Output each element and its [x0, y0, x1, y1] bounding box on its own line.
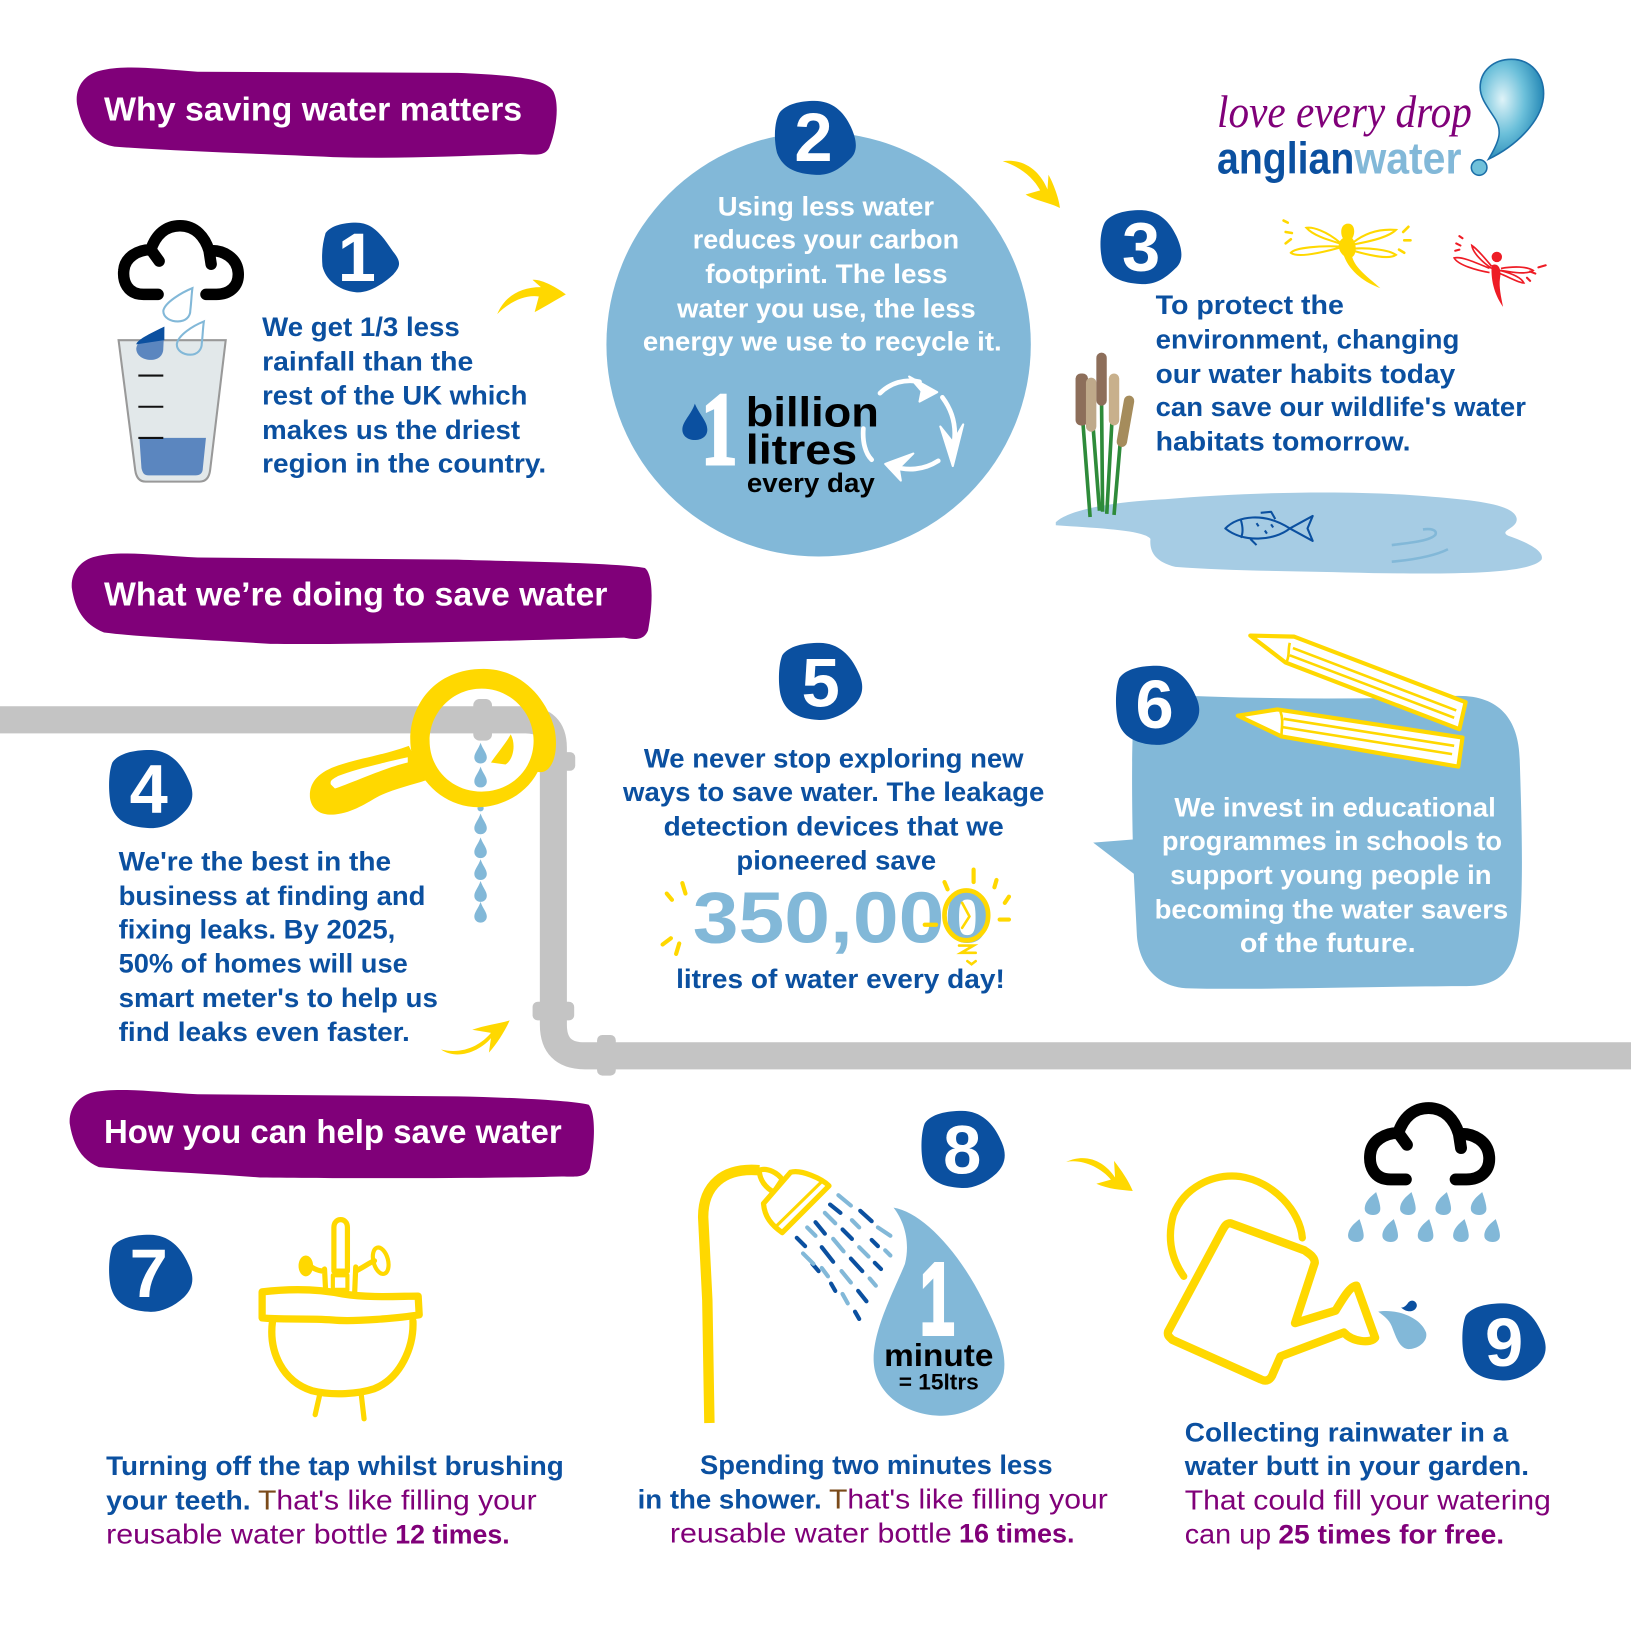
step 8 text: Spending two minutes less — [700, 1450, 1053, 1480]
step 2 number — [775, 99, 856, 176]
heading: what we're doing — [72, 554, 652, 644]
heading: why saving water matters: Why saving water matters — [104, 92, 522, 129]
step 8 number — [921, 1111, 1005, 1188]
step 9 text: can up — [1185, 1519, 1271, 1550]
step 9 text — [1184, 1418, 1551, 1550]
icon: fish — [1225, 512, 1313, 545]
step 9 number: 9 — [1485, 1304, 1523, 1381]
step 8 text: reusable water bottle — [670, 1518, 952, 1549]
icon: water splash — [1378, 1301, 1426, 1349]
step 5 text: 350,000 — [693, 877, 990, 958]
step 3 text: To protect the — [1156, 290, 1344, 320]
arrow: step 4 to 5 — [441, 1020, 510, 1054]
step 8 number: 8 — [943, 1111, 981, 1188]
step 2 text — [643, 191, 1002, 357]
step 4 number — [109, 750, 192, 828]
step 7 number: 7 — [130, 1235, 168, 1312]
icon: red dragonfly — [1454, 236, 1546, 307]
step 7 number — [109, 1235, 192, 1312]
step 4 text: find leaks even faster. — [119, 1017, 410, 1047]
arrow: step 1 to 2 — [497, 280, 566, 314]
step 5 text — [622, 744, 1044, 994]
step 9 text: Collecting rainwater in a — [1185, 1418, 1509, 1448]
step 1 text — [262, 312, 546, 478]
icon: shower — [703, 1169, 890, 1423]
logo: love every drop, anglian water — [1217, 59, 1544, 184]
step 7 text: That's like filling your — [258, 1484, 537, 1515]
leak drops — [474, 743, 487, 923]
step 3 text: our water habits today — [1156, 359, 1455, 389]
step 5 number: 5 — [802, 644, 840, 721]
logo: love every drop, anglian water: anglian — [1217, 135, 1354, 184]
step 4 text: business at finding and — [119, 881, 425, 911]
heading: how you can help: How you can help save water — [104, 1114, 562, 1151]
step 3 number — [1100, 208, 1181, 285]
step 1 text: rest of the UK which — [262, 381, 527, 411]
icon: drop with 1 minute: 1 — [920, 1242, 955, 1357]
panel: step 2 circle — [606, 99, 1031, 557]
heading: what we're doing: What we’re doing to save water — [104, 576, 608, 613]
step 2 text: energy we use to recycle it. — [643, 327, 1002, 357]
heading: how you can help — [70, 1090, 594, 1178]
1 billion litres stat: litres — [746, 426, 857, 473]
step 5 text: ways to save water. The leakage — [622, 777, 1044, 807]
step 7 text: your teeth. — [106, 1485, 251, 1515]
step 6 text: of the future. — [1240, 928, 1416, 958]
step 6 text: programmes in schools to — [1162, 826, 1502, 856]
icon: rain cloud — [1348, 1108, 1500, 1242]
step 1 number — [322, 219, 399, 296]
step 7 text: reusable water bottle — [106, 1519, 388, 1550]
arrow: step 8 to 9 — [1066, 1158, 1133, 1191]
icon: magnifying glass and leak — [310, 669, 556, 923]
step 4 number: 4 — [130, 750, 168, 827]
step 6 text: We invest in educational — [1174, 793, 1496, 823]
step 6 text: support young people in — [1170, 860, 1492, 890]
step 3 text: can save our wildlife's water — [1156, 392, 1526, 422]
step 4 text — [119, 847, 438, 1047]
step 1 text: region in the country. — [262, 448, 546, 478]
step 1: cloud and glass icon — [119, 226, 238, 482]
step 4 text: fixing leaks. By 2025, — [119, 914, 395, 944]
step 2 text: Using less water — [718, 191, 935, 221]
1 billion litres stat — [682, 372, 879, 498]
1 billion litres stat: every day — [747, 468, 875, 498]
icon: watering can — [1168, 1176, 1375, 1381]
heading: why saving water matters — [77, 68, 557, 158]
step 9 text: That could fill your watering — [1185, 1484, 1551, 1515]
step 9 text: water butt in your garden. — [1184, 1451, 1529, 1481]
panel: step 6 speech bubble — [1093, 636, 1522, 989]
step 1 text: We get 1/3 less — [262, 312, 460, 342]
step 9 text: 25 times for free. — [1278, 1520, 1504, 1550]
step 4 text: smart meter's to help us — [119, 983, 438, 1013]
icon: drop with 1 minute: minute — [884, 1338, 993, 1373]
step 4 text: We're the best in the — [119, 847, 391, 877]
logo: love every drop, anglian water: love every drop — [1217, 86, 1472, 137]
icon: yellow dragonfly — [1284, 221, 1410, 288]
logo: love every drop, anglian water: water — [1353, 135, 1461, 184]
step 8 text: That's like filling your — [829, 1483, 1108, 1514]
step 1 text: rainfall than the — [262, 346, 473, 376]
step 2 text: reduces your carbon — [693, 225, 959, 255]
step 5 number — [779, 643, 862, 721]
step 3 number: 3 — [1122, 208, 1160, 285]
step 6 text: becoming the water savers — [1155, 894, 1508, 924]
step 8 text: in the shower. — [638, 1484, 822, 1514]
step 2 text: water you use, the less — [676, 293, 976, 323]
step 5 text: pioneered save — [736, 846, 936, 876]
step 6 text — [1155, 793, 1508, 958]
pipe — [0, 699, 1631, 1076]
icon: drop with 1 minute — [874, 1208, 1004, 1416]
1 billion litres stat: 1 — [701, 372, 737, 487]
step 5 text: detection devices that we — [664, 811, 1004, 841]
step 3 text — [1156, 290, 1526, 456]
step 7 text: Turning off the tap whilst brushing — [106, 1451, 564, 1481]
step 1 number: 1 — [338, 219, 376, 296]
1 billion litres stat: billion — [746, 388, 879, 435]
step 6 number — [1116, 666, 1199, 745]
step 6 number: 6 — [1136, 666, 1174, 743]
step 4 text: 50% of homes will use — [119, 949, 408, 979]
icon: light bulb and sparks — [663, 870, 1009, 964]
step 1 text: makes us the driest — [262, 415, 520, 445]
step 2 text: footprint. The less — [705, 259, 948, 289]
step 8 text: 16 times. — [959, 1519, 1075, 1549]
icon: pencils — [1238, 636, 1466, 767]
step 3 text: habitats tomorrow. — [1156, 426, 1410, 456]
step 8 text — [638, 1450, 1108, 1549]
arrow: step 2 to 3 — [1003, 161, 1060, 208]
step 5 text: litres of water every day! — [676, 964, 1005, 994]
icon: reeds — [1076, 353, 1135, 517]
step 7 text: 12 times. — [395, 1520, 510, 1550]
step 7 text — [106, 1451, 564, 1550]
step 3 text: environment, changing — [1156, 324, 1459, 354]
spray dashes — [797, 1195, 890, 1319]
icon: drop with 1 minute: = 15ltrs — [899, 1370, 979, 1395]
step 2 number: 2 — [794, 99, 833, 176]
step 5 text: We never stop exploring new — [644, 744, 1025, 774]
step 9 number — [1462, 1303, 1546, 1381]
pond — [1056, 492, 1542, 574]
icon: recycling arrows — [863, 377, 963, 481]
icon: sink — [262, 1220, 419, 1419]
